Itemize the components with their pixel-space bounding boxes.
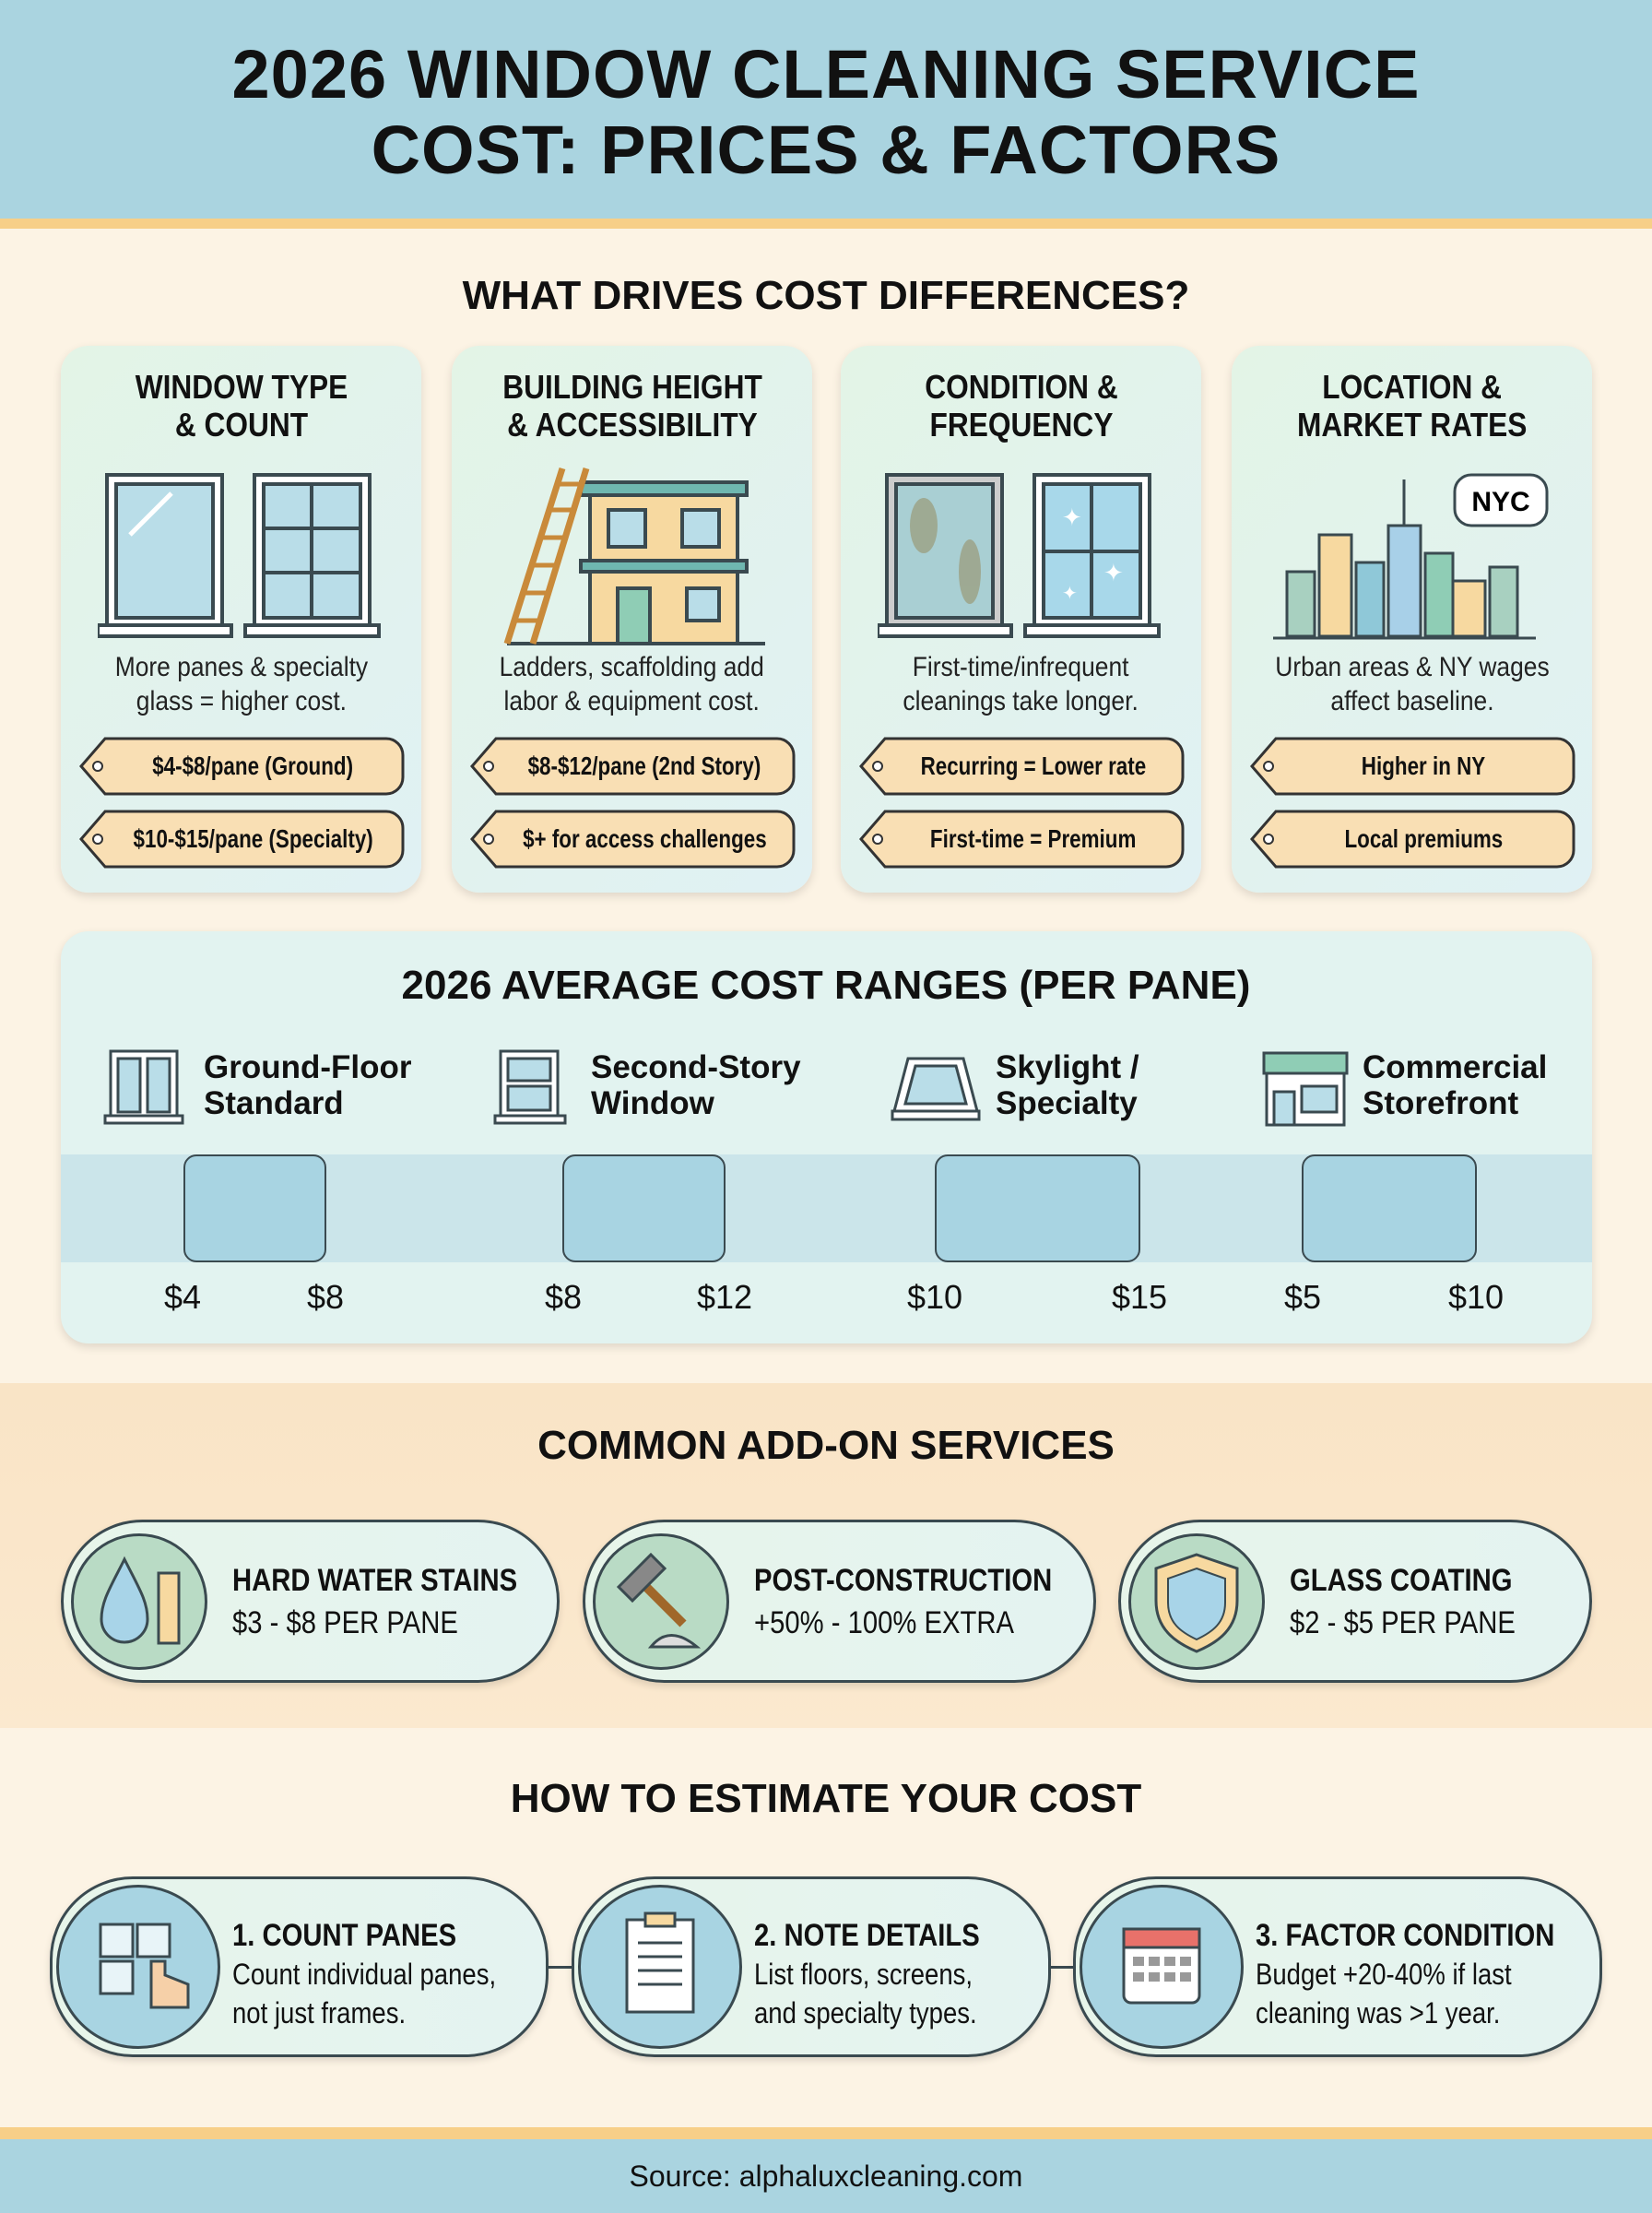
panel: condition — [841, 346, 1201, 893]
tag: access: $+ for access challenges — [523, 824, 767, 853]
footer — [0, 2127, 1652, 2213]
pill: post-construction: +50% - 100% EXTRA — [754, 1605, 1014, 1640]
text: $5 — [1284, 1278, 1321, 1316]
connector line — [535, 1966, 1088, 1969]
heading: add-ons: COMMON ADD-ON SERVICES — [537, 1423, 1115, 1468]
pill: glass coating: $2 - $5 PER PANE — [1290, 1605, 1516, 1640]
icon: second story — [494, 1049, 566, 1125]
panel: window type: & COUNT — [174, 406, 308, 444]
bar: second — [562, 1154, 726, 1262]
tag: first-time — [859, 810, 1184, 869]
panel: building height: BUILDING HEIGHT — [502, 368, 761, 406]
panel: location: affect baseline. — [1330, 686, 1493, 716]
label: skylight: Skylight / — [996, 1049, 1139, 1085]
title: COST: PRICES & FACTORS — [372, 112, 1280, 188]
title: 2026 WINDOW CLEANING SERVICE — [232, 36, 1420, 112]
step 2: 2. NOTE DETAILS — [754, 1918, 980, 1953]
step 3: cleaning was >1 year. — [1256, 1996, 1500, 2030]
label: second story: Window — [591, 1085, 714, 1121]
pill: glass coating: GLASS COATING — [1290, 1563, 1513, 1598]
panel: building height: labor & equipment cost. — [504, 686, 760, 716]
label: second story: Second-Story — [591, 1049, 801, 1085]
tag: specialty price — [79, 810, 404, 869]
text: $15 — [1112, 1278, 1167, 1316]
tag: 2nd story — [470, 738, 795, 795]
tag: higher in NY — [1250, 738, 1575, 795]
tag: recurring — [859, 738, 1184, 795]
panel: building height — [452, 346, 812, 893]
header band — [0, 0, 1652, 219]
step 1: Count individual panes, — [232, 1958, 496, 1991]
step 3: Budget +20-40% if last — [1256, 1958, 1512, 1991]
icon: dirty and clean windows — [878, 473, 1161, 638]
label: ground floor: Standard — [204, 1085, 344, 1121]
title — [232, 36, 1420, 188]
label: storefront — [1363, 1049, 1547, 1121]
text: $4 — [164, 1278, 201, 1316]
tag: first-time: First-time = Premium — [930, 824, 1136, 853]
text: $8 — [307, 1278, 344, 1316]
pill: hard water: HARD WATER STAINS — [232, 1563, 517, 1598]
panel: condition: cleanings take longer. — [903, 686, 1139, 716]
panel: cost ranges chart — [61, 931, 1592, 1343]
icon: city skyline with NYC bubble — [1273, 474, 1549, 640]
icon: dirty and clean windows: ✦ — [1103, 559, 1124, 586]
step 3: 3. FACTOR CONDITION — [1256, 1918, 1554, 1953]
icon: skylight — [891, 1057, 981, 1121]
panel: location: Urban areas & NY wages — [1275, 652, 1549, 682]
icon: building with ladder — [503, 467, 765, 645]
step 1: not just frames. — [232, 1996, 406, 2030]
panel: building height: & ACCESSIBILITY — [507, 406, 757, 444]
chart band — [61, 1154, 1592, 1262]
tag: specialty price: $10-$15/pane (Specialty) — [133, 824, 373, 853]
heading: what drives: WHAT DRIVES COST DIFFERENCES? — [463, 273, 1189, 318]
label: skylight — [996, 1049, 1139, 1121]
tag: higher in NY: Higher in NY — [1362, 751, 1486, 780]
step 1: 1. COUNT PANES — [232, 1918, 456, 1953]
step 2 — [572, 1876, 1051, 2057]
label: skylight: Specialty — [996, 1085, 1138, 1121]
tag: local premiums — [1250, 810, 1575, 869]
label: storefront: Commercial — [1363, 1049, 1547, 1085]
panel: condition: First-time/infrequent — [913, 652, 1129, 682]
panel: condition: FREQUENCY — [929, 406, 1113, 444]
panel: location: MARKET RATES — [1297, 406, 1527, 444]
panel: window type: glass = higher cost. — [136, 686, 347, 716]
step 3 — [1073, 1876, 1602, 2057]
heading: cost ranges: 2026 AVERAGE COST RANGES (PER PANE) — [402, 963, 1250, 1008]
panel: location: LOCATION & — [1322, 368, 1502, 406]
numbers — [164, 1278, 1504, 1316]
step 2: List floors, screens, — [754, 1958, 973, 1991]
icon: ground floor — [103, 1049, 184, 1125]
tag: recurring: Recurring = Lower rate — [920, 751, 1146, 780]
tag: ground price: $4-$8/pane (Ground) — [153, 751, 353, 780]
panel: window type — [61, 346, 421, 893]
tag: 2nd story: $8-$12/pane (2nd Story) — [527, 751, 761, 780]
label: second story — [591, 1049, 801, 1121]
pill: post-construction — [583, 1520, 1096, 1683]
panel: window type: More panes & specialty — [114, 652, 368, 682]
text: $10 — [1448, 1278, 1504, 1316]
tag: ground price — [79, 738, 404, 795]
panel: building height: Ladders, scaffolding add — [500, 652, 764, 682]
tag: access — [470, 810, 795, 869]
text: $8 — [545, 1278, 582, 1316]
panel: condition: CONDITION & — [925, 368, 1117, 406]
icon: dirty and clean windows: ✦ — [1062, 584, 1078, 604]
label: ground floor: Ground-Floor — [204, 1049, 412, 1085]
pill: hard water: $3 - $8 PER PANE — [232, 1605, 458, 1640]
text: $10 — [907, 1278, 962, 1316]
bar: skylight — [935, 1154, 1140, 1262]
heading: estimate: HOW TO ESTIMATE YOUR COST — [511, 1776, 1141, 1821]
tag: local premiums: Local premiums — [1345, 824, 1503, 853]
bar: storefront — [1302, 1154, 1477, 1262]
section: add-on band — [0, 1383, 1652, 1728]
panel: window type: WINDOW TYPE — [135, 368, 348, 406]
pill: hard water — [61, 1520, 560, 1683]
pill: glass coating — [1118, 1520, 1592, 1683]
footer: Source: alphaluxcleaning.com — [630, 2160, 1022, 2193]
panel: location — [1232, 346, 1592, 893]
pill: post-construction: POST-CONSTRUCTION — [754, 1563, 1052, 1598]
label: ground floor — [204, 1049, 412, 1121]
icon: windows — [98, 473, 381, 638]
text: $12 — [697, 1278, 752, 1316]
bar: ground — [183, 1154, 326, 1262]
step 2: and specialty types. — [754, 1996, 977, 2030]
icon: city skyline with NYC bubble: NYC — [1471, 487, 1530, 517]
icon: storefront — [1263, 1051, 1348, 1127]
step 1 — [50, 1876, 549, 2057]
label: storefront: Storefront — [1363, 1085, 1518, 1121]
icon: dirty and clean windows: ✦ — [1062, 503, 1082, 531]
